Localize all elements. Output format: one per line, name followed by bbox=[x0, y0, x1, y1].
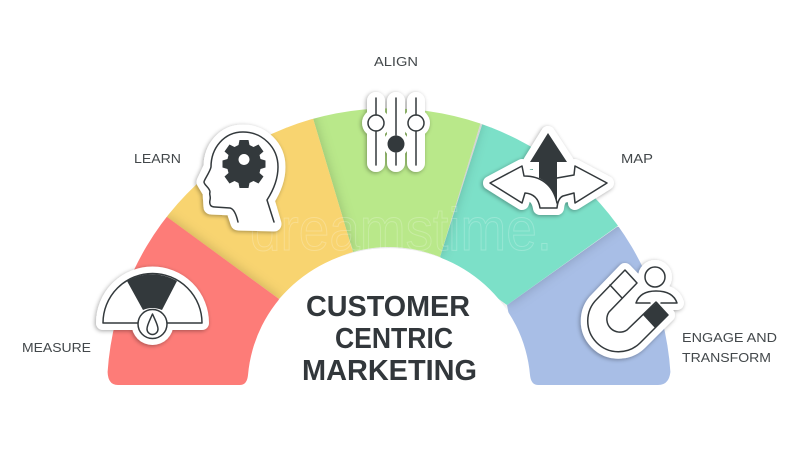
segment: engage and transform bbox=[507, 227, 670, 385]
label: map: MAP bbox=[621, 151, 653, 166]
segment: align bbox=[313, 108, 485, 258]
segment: map bbox=[437, 124, 620, 308]
segment: learn bbox=[166, 118, 356, 299]
title: MARKETING bbox=[302, 355, 477, 387]
semicircular arch of five segments bbox=[108, 108, 670, 385]
label: align: ALIGN bbox=[374, 54, 418, 69]
label: engage and transform: ENGAGE AND bbox=[682, 330, 777, 345]
icon: three-way arrows bbox=[490, 133, 607, 208]
watermark: dreamstime. bbox=[250, 196, 552, 263]
label: engage and transform: TRANSFORM bbox=[682, 350, 771, 365]
icon: sliders bbox=[362, 98, 430, 165]
icon: magnet attracting person bbox=[588, 267, 677, 352]
gear bbox=[222, 140, 266, 188]
label: measure: MEASURE bbox=[22, 340, 91, 355]
title: CUSTOMER bbox=[306, 291, 470, 323]
title bbox=[302, 291, 477, 387]
icon: gauge bbox=[103, 274, 202, 345]
title: CENTRIC bbox=[335, 323, 453, 355]
icon: head with gear bbox=[204, 132, 278, 224]
label: learn: LEARN bbox=[134, 151, 181, 166]
segment: measure bbox=[108, 214, 281, 385]
label: engage and transform bbox=[682, 330, 777, 365]
